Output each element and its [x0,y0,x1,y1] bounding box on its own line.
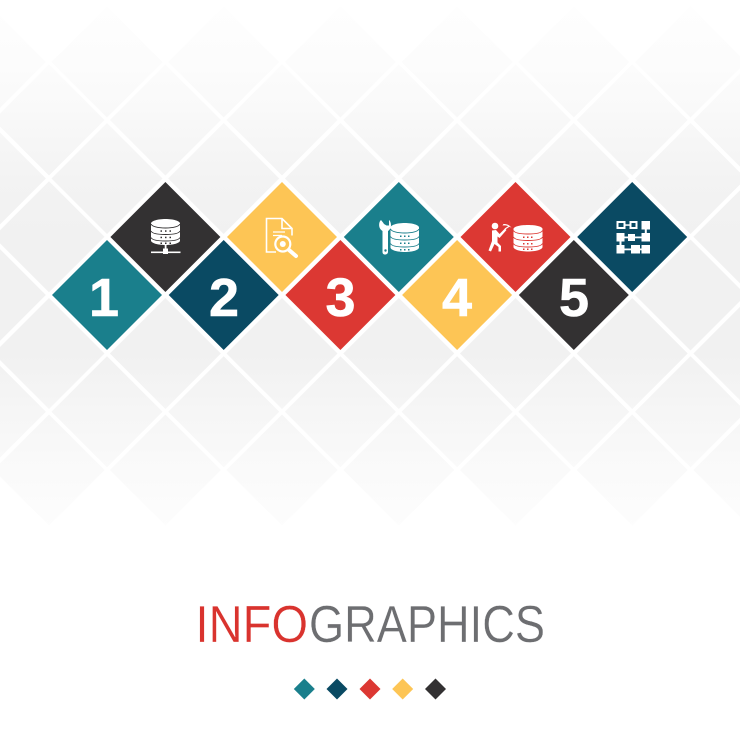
icon: worker with pickaxe and database [488,223,542,252]
step 4: yellow diamond with number [402,240,512,350]
panel: teal diamond with wrench and database icon [344,182,454,292]
icon: wrench and database [379,220,419,254]
step 5: dark diamond with number: 5 [559,268,589,328]
icon: document search [266,218,296,256]
panel: navy diamond with flow blocks icon [577,182,687,292]
panel: red diamond with worker mining database icon [460,182,570,292]
step 1: teal diamond with number [52,240,162,350]
step 2: navy diamond with number [169,240,279,350]
step 4: yellow diamond with number: 4 [442,268,472,328]
background diamond grid [0,6,740,526]
panel: yellow diamond with document search icon [227,182,337,292]
colour key diamonds [294,678,446,700]
title: INFO [196,595,308,653]
step 5: dark diamond with number [519,240,629,350]
step 2: navy diamond with number: 2 [209,268,239,328]
icon: database network [151,219,180,254]
step 1: teal diamond with number: 1 [89,268,119,328]
icon: flow blocks [616,221,650,254]
title [196,595,545,653]
panel: dark diamond with database network icon [110,182,220,292]
step 3: red diamond with number [285,240,395,350]
step 3: red diamond with number: 3 [325,268,356,328]
title: GRAPHICS [309,595,545,653]
